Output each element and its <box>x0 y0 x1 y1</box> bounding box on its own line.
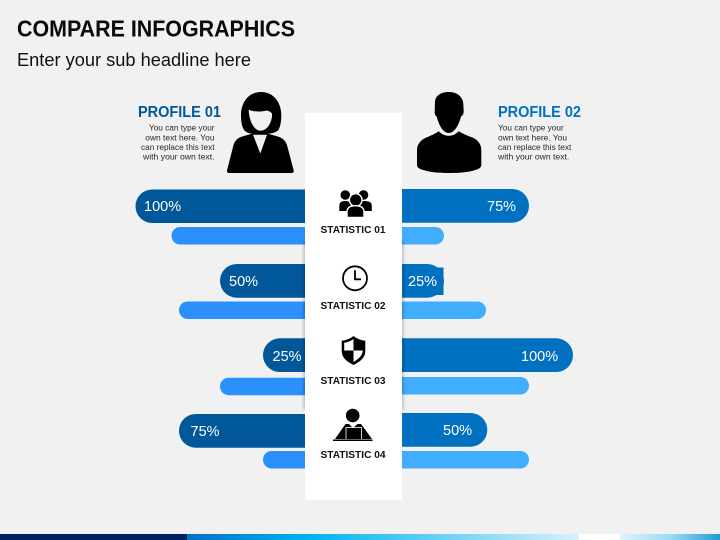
label: statistic 03: STATISTIC 03 <box>320 376 386 387</box>
profile 02 text: own text here. You <box>498 132 567 142</box>
icon: man profile <box>417 92 481 173</box>
row 2 right bars <box>370 264 486 319</box>
title: COMPARE INFOGRAPHICS <box>17 16 295 42</box>
row 3 right bars <box>370 338 573 394</box>
icon: shield <box>342 336 365 365</box>
row 4 left bars: 75% <box>190 424 220 440</box>
profile 01 text: with your own text. <box>142 152 214 162</box>
profile 01 text: can replace this text <box>141 142 215 152</box>
profile 01 text <box>138 104 221 162</box>
row 1 left bars: 100% <box>144 199 181 215</box>
profile 02 text: You can type your <box>498 122 564 132</box>
icon: woman profile <box>227 92 294 173</box>
profile 01 text: own text here. You <box>145 132 215 142</box>
row 4 left bars <box>179 414 353 468</box>
icon: clock <box>343 266 367 290</box>
sub headline: Enter your sub headline here <box>17 50 251 70</box>
row 4 right bars <box>370 413 529 468</box>
row 1 left bars <box>136 190 342 244</box>
panel: statistics column <box>305 113 402 500</box>
panel shadow <box>304 240 404 410</box>
row 2 left bars <box>179 264 349 319</box>
footer band <box>0 534 720 540</box>
profile 02 text: can replace this text <box>498 142 572 152</box>
label: statistic 04: STATISTIC 04 <box>320 450 386 461</box>
row 2 left bars: 50% <box>229 274 258 290</box>
profile 02 text: with your own text. <box>497 152 569 162</box>
profile 02 text: PROFILE 02 <box>498 104 581 121</box>
row 3 right bars: 100% <box>521 349 558 365</box>
profile 01 text: You can type your <box>149 122 215 132</box>
row 3 left bars: 25% <box>272 349 302 365</box>
row 1 right bars <box>360 189 529 244</box>
row 1 right bars: 75% <box>487 199 516 215</box>
icon: person at laptop <box>333 409 372 441</box>
bar chart: right profile <box>360 189 573 468</box>
profile 02 text <box>497 104 581 162</box>
profile 01 text: PROFILE 01 <box>138 104 221 121</box>
row 3 left bars <box>220 338 350 395</box>
label: statistic 01: STATISTIC 01 <box>320 225 386 236</box>
row 2 right bars: 25% <box>408 274 437 290</box>
row 4 right bars: 50% <box>443 423 472 439</box>
icon: group of people <box>339 190 372 218</box>
bar chart: left profile <box>136 190 353 468</box>
label: statistic 02: STATISTIC 02 <box>320 301 386 312</box>
